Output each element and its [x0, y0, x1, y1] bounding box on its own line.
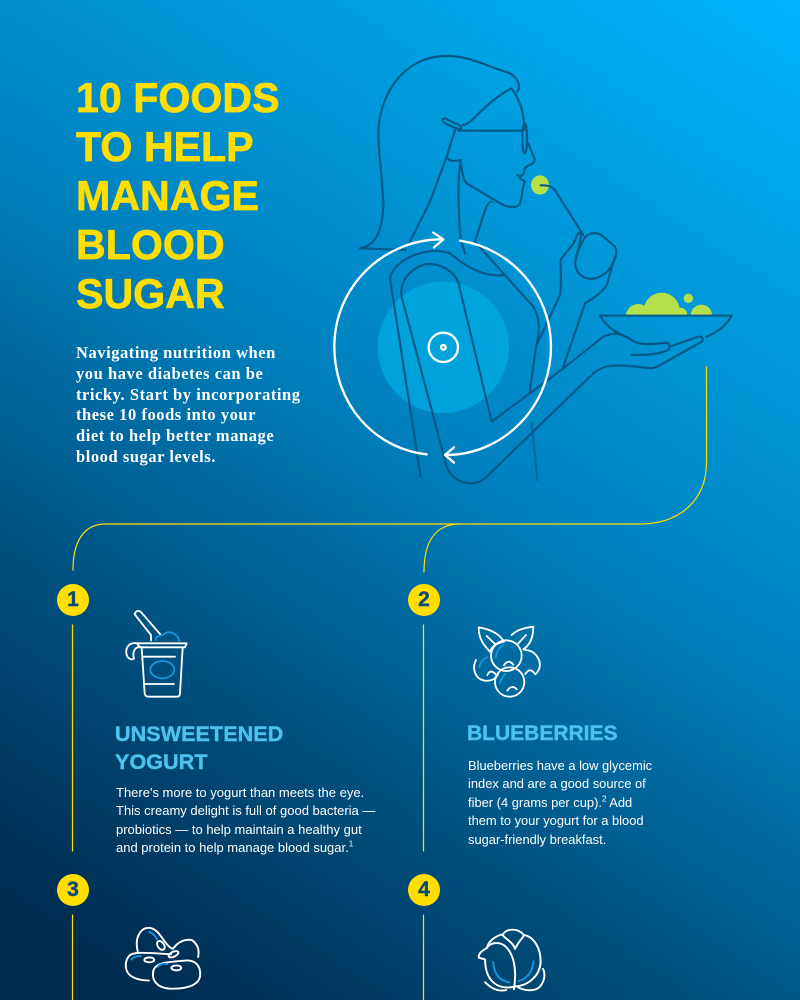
text: blueberries — [468, 758, 652, 847]
intro text: tricky. Start by incorporating — [76, 385, 301, 404]
text: blueberries: sugar-friendly breakfast. — [468, 832, 606, 847]
number badge 2: 2 — [418, 588, 430, 611]
fork — [541, 185, 583, 235]
target icon — [429, 333, 458, 362]
title: BLOOD — [76, 221, 225, 268]
food piece — [684, 294, 693, 303]
intro text — [76, 343, 301, 466]
intro text: these 10 foods into your — [76, 405, 256, 424]
icon: cabbage — [479, 930, 544, 991]
title: MANAGE — [76, 172, 259, 219]
text: yogurt: and protein to help manage blood sugar.1 — [116, 840, 353, 855]
number badge 2 — [408, 584, 440, 616]
icon: blueberries — [474, 627, 540, 697]
bowl — [600, 316, 732, 338]
title: SUGAR — [76, 270, 225, 317]
food on fork — [531, 175, 549, 195]
intro text: diet to help better manage — [76, 426, 274, 445]
highlight circle — [378, 282, 509, 413]
number badge 1 — [57, 584, 89, 616]
heading: yogurt: YOGURT — [115, 750, 208, 774]
title: TO HELP — [76, 123, 254, 170]
text: yogurt: This creamy delight is full of good bacteria — — [116, 803, 375, 818]
icon: beans — [126, 928, 200, 989]
text: blueberries: fiber (4 grams per cup).2 Add — [468, 795, 632, 810]
illustration: woman eating — [334, 56, 732, 483]
text: blueberries: index and are a good source of — [468, 776, 646, 791]
title: 10 FOODS — [76, 74, 280, 121]
salad in bowl — [626, 292, 712, 315]
text: yogurt: probiotics — to help maintain a healthy gut — [116, 822, 362, 837]
connector lines — [72, 367, 706, 1000]
number badge 3 — [57, 874, 89, 906]
intro text: blood sugar levels. — [76, 447, 216, 466]
number badge 3: 3 — [67, 878, 79, 901]
text: yogurt — [116, 785, 376, 855]
heading: blueberries: BLUEBERRIES — [467, 722, 618, 745]
number badge 1: 1 — [67, 588, 79, 611]
number badge 4: 4 — [418, 878, 430, 901]
intro text: Navigating nutrition when — [76, 343, 276, 362]
intro text: you have diabetes can be — [76, 364, 263, 383]
text: blueberries: them to your yogurt for a blood — [468, 813, 644, 828]
heading: yogurt: UNSWEETENED — [115, 722, 283, 746]
title — [76, 74, 280, 317]
text: blueberries: Blueberries have a low glycemic — [468, 758, 652, 773]
text: yogurt: There's more to yogurt than meets the eye. — [116, 785, 364, 800]
rotation arrows — [334, 233, 551, 463]
icon: yogurt — [126, 611, 187, 697]
woman line art — [360, 56, 703, 483]
heading: yogurt — [115, 722, 283, 774]
number badge 4 — [408, 874, 440, 906]
